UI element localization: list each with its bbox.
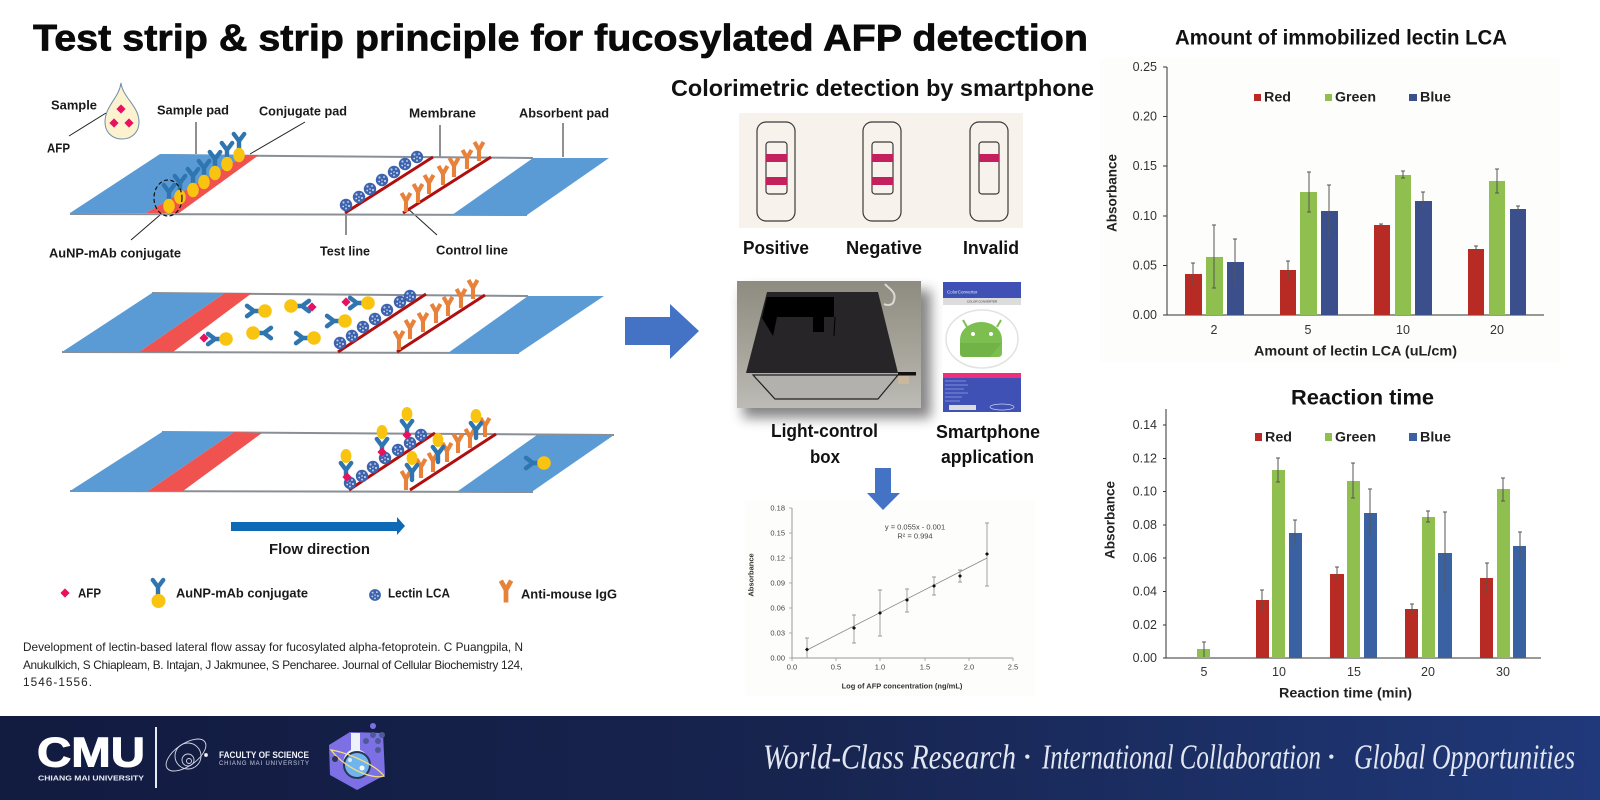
chart: reaction time: 0.00	[1133, 651, 1157, 665]
chart: amount of immobilized lectin LCA: 0.00	[1133, 308, 1157, 322]
logo: faculty orbit	[161, 733, 211, 777]
label: AuNP-mAb conjugate: AuNP-mAb conjugate	[49, 246, 181, 260]
chart: calibration curve: 0.15	[770, 528, 785, 538]
slogan: World-Class Research	[763, 738, 1016, 776]
chart: reaction time: 0.06	[1133, 551, 1157, 565]
chart: amount of immobilized lectin LCA: Amount of lectin LCA (uL/cm)	[1254, 344, 1457, 358]
bars: red series	[1256, 574, 1493, 658]
chart legend: Red	[1265, 430, 1292, 444]
chart: calibration curve: y = 0.055x - 0.001	[885, 522, 945, 532]
icon: invalid strip	[970, 122, 1008, 221]
bars: blue series	[1227, 201, 1526, 315]
label: absorbent pad: Absorbent pad	[519, 106, 609, 120]
chart: amount of immobilized lectin LCA: 0.20	[1133, 110, 1157, 124]
legend	[60, 580, 617, 608]
logo: faculty of science text	[219, 750, 309, 767]
photo: light-control box	[737, 281, 931, 418]
chart: calibration curve: 2.0	[964, 662, 974, 672]
chart legend	[1255, 430, 1452, 444]
chart: reaction time: Absorbance	[1102, 481, 1118, 559]
legend: lectin LCA	[369, 586, 451, 601]
label: flow direction: Flow direction	[269, 542, 370, 558]
chart: reaction time: 0.04	[1133, 584, 1157, 598]
icon: negative strip	[863, 122, 901, 221]
citation: 1546-1556.	[23, 675, 92, 689]
panel: strip diagram, initial state	[47, 83, 609, 260]
label: smartphone application: Smartphone	[936, 422, 1040, 442]
strip 1 body	[70, 154, 609, 215]
label: AFP: AFP	[47, 140, 70, 156]
photo: smartphone application: COLOR CONVERTER	[967, 300, 998, 304]
label: control line: Control line	[436, 242, 508, 258]
bars: green series	[1206, 175, 1505, 315]
chart: calibration curve: Log of AFP concentration (ng/mL)	[842, 682, 963, 690]
chart: reaction time: 0.02	[1133, 618, 1157, 632]
label: positive: Positive	[743, 238, 809, 258]
icon: android logo	[946, 310, 1018, 368]
label: sample: Sample	[51, 98, 97, 112]
legend: AFP	[60, 586, 101, 600]
chart: amount of immobilized lectin LCA	[1100, 58, 1560, 362]
chart: reaction time: 20	[1421, 665, 1435, 679]
label: light-control box: Light-control	[771, 421, 878, 441]
logo: faculty of science text: FACULTY OF SCIENCE	[219, 750, 309, 760]
chart: reaction time: Reaction time (min)	[1279, 686, 1412, 700]
citation: Development of lectin-based lateral flow assay for fucosylated alpha-fetoprotein. C Puangpila, N	[23, 640, 523, 654]
label: smartphone application	[936, 422, 1040, 467]
citation: Anukulkich, S Chiapleam, B. Intajan, J Jakmunee, S Pencharee. Journal of Cellular Biochemistry 124,	[23, 658, 523, 672]
arrow: flow direction	[231, 517, 405, 535]
label: smartphone application: application	[941, 447, 1034, 467]
heading: colorimetric detection: Colorimetric detection by smartphone	[671, 75, 1094, 101]
chart: calibration curve: 0.12	[770, 554, 785, 562]
chart: amount of immobilized lectin LCA: 10	[1396, 323, 1410, 337]
panel: strip results	[739, 113, 1023, 228]
conjugates on conjugate pad	[163, 134, 245, 213]
chart legend: Blue	[1420, 90, 1452, 104]
legend: anti-mouse IgG	[501, 581, 617, 602]
chart: amount of immobilized lectin LCA: 0.05	[1133, 258, 1157, 272]
arrow: strip to detection	[625, 304, 699, 359]
label: sample pad: Sample pad	[157, 102, 229, 118]
chart: reaction time: 10	[1272, 665, 1286, 679]
chart: amount of immobilized lectin LCA: 0.10	[1133, 209, 1157, 223]
logo: flask emblem	[329, 723, 385, 790]
legend: AFP: AFP	[78, 586, 101, 600]
label: membrane: Membrane	[409, 106, 476, 120]
legend: anti-mouse IgG: Anti-mouse IgG	[521, 586, 617, 602]
heading: reaction time chart: Reaction time	[1291, 386, 1434, 410]
legend: lectin LCA: Lectin LCA	[388, 586, 451, 600]
dashed highlight circle	[154, 180, 182, 216]
chart: reaction time: 15	[1347, 665, 1361, 679]
label: test line: Test line	[320, 244, 370, 258]
slogan: •	[1328, 747, 1334, 767]
lectin beads	[340, 151, 423, 211]
chart: amount of immobilized lectin LCA: 0.15	[1133, 159, 1157, 173]
chart: reaction time: 5	[1201, 665, 1208, 679]
photo: smartphone application: ColorConverter	[947, 290, 978, 294]
panel: strip diagram, result state	[70, 407, 614, 492]
slogan: International Collaboration	[1041, 738, 1321, 776]
bars: red series	[1185, 225, 1484, 315]
chart legend	[1254, 90, 1452, 104]
chart: calibration curve: 0.0	[787, 662, 797, 672]
chart: amount of immobilized lectin LCA: 0.25	[1133, 60, 1157, 74]
chart: reaction time: 30	[1496, 665, 1510, 679]
icon: positive strip	[757, 122, 795, 221]
chart: reaction time: 0.08	[1133, 518, 1157, 532]
logo: CMU: CMU	[37, 728, 145, 776]
legend: AuNP-mAb conjugate	[152, 580, 308, 608]
label: invalid: Invalid	[963, 238, 1019, 258]
logo: CMU: CHIANG MAI UNIVERSITY	[38, 774, 144, 782]
chart: calibration curve: 0.00	[770, 654, 785, 662]
error bars	[1202, 458, 1522, 657]
heading: amount of lectin chart: Amount of immobilized lectin LCA	[1175, 26, 1507, 50]
chart: reaction time: 0.14	[1133, 418, 1157, 432]
label: light-control box	[771, 421, 878, 467]
chart: amount of immobilized lectin LCA: 2	[1211, 323, 1218, 337]
chart: calibration curve	[745, 500, 1035, 696]
chart: amount of immobilized lectin LCA: 20	[1490, 323, 1504, 337]
icon: sample drop	[105, 83, 139, 139]
chart: calibration curve: 1.5	[920, 662, 930, 672]
chart legend: Blue	[1420, 430, 1452, 444]
label: negative: Negative	[846, 238, 922, 258]
chart: calibration curve: R² = 0.994	[897, 532, 933, 540]
legend: AuNP-mAb conjugate: AuNP-mAb conjugate	[176, 586, 308, 600]
chart: calibration curve: Absorbance	[746, 553, 756, 597]
chart: calibration curve: 2.5	[1008, 662, 1018, 672]
footer banner	[0, 716, 1600, 800]
leader lines	[69, 113, 563, 240]
logo: faculty of science text: CHIANG MAI UNIVERSITY	[219, 761, 309, 767]
photo: smartphone application	[943, 282, 1021, 412]
chart: reaction time	[1102, 409, 1541, 700]
chart: amount of immobilized lectin LCA: 5	[1305, 323, 1312, 337]
citation	[23, 640, 523, 689]
title: Test strip & strip principle for fucosylated AFP detection	[33, 18, 1088, 58]
slogan	[763, 738, 1575, 776]
bars: green series	[1197, 470, 1510, 658]
chart: calibration curve: 0.03	[770, 628, 785, 638]
arrow: to calibration chart	[867, 468, 900, 510]
chart: reaction time: 0.10	[1133, 484, 1157, 498]
bars: blue series	[1289, 513, 1526, 658]
slogan: •	[1024, 747, 1030, 767]
chart: calibration curve: 0.18	[770, 504, 785, 512]
label: light-control box: box	[810, 447, 840, 467]
error bars	[1191, 169, 1520, 288]
chart: calibration curve: 0.5	[831, 662, 841, 672]
chart: reaction time: 0.12	[1133, 452, 1157, 466]
chart: calibration curve: 0.06	[770, 604, 785, 612]
chart: amount of immobilized lectin LCA: Absorbance	[1104, 154, 1120, 232]
chart: calibration curve: 0.09	[770, 578, 785, 588]
chart: calibration curve: 1.0	[875, 662, 885, 672]
panel: strip diagram, flow state	[62, 280, 604, 353]
anti-mouse IgG	[402, 142, 484, 212]
chart legend: Green	[1335, 430, 1376, 444]
chart legend: Red	[1264, 90, 1291, 104]
chart legend: Green	[1335, 90, 1376, 104]
label: conjugate pad: Conjugate pad	[259, 104, 347, 118]
